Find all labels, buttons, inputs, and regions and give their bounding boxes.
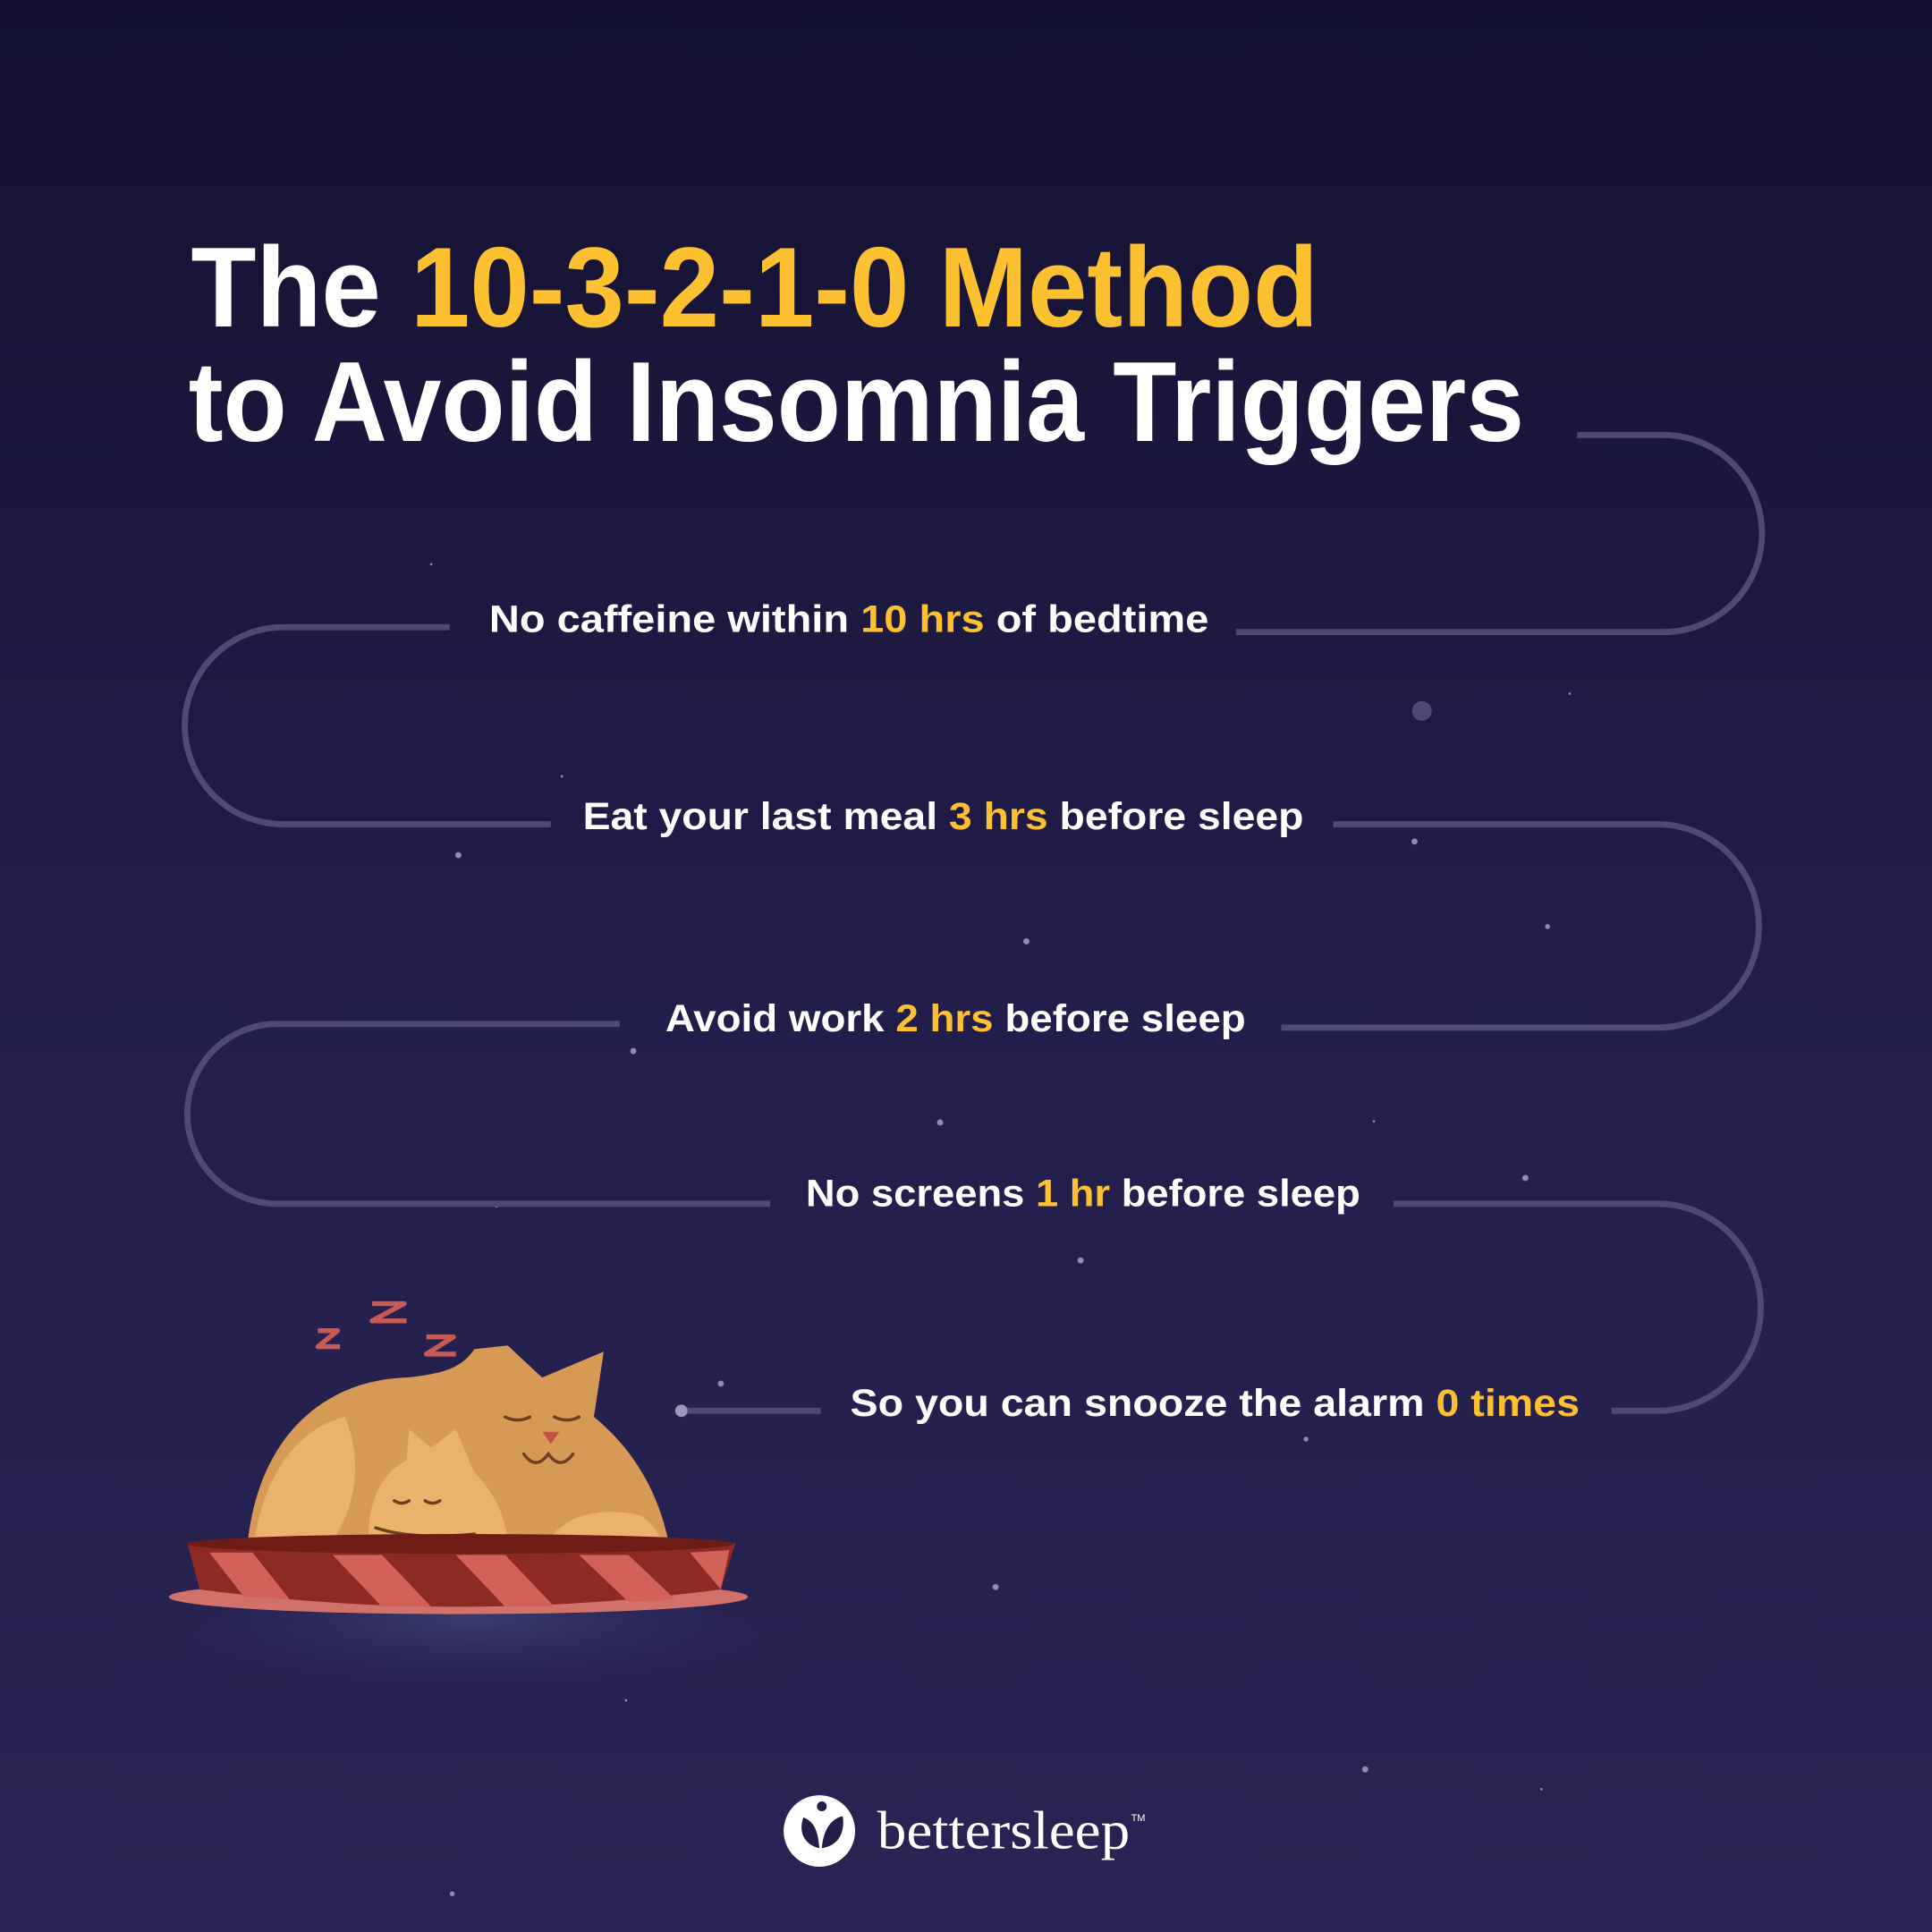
face details xyxy=(376,1417,579,1536)
zzz xyxy=(318,1303,456,1446)
step 10: No caffeine within 10 hrs of bedtime xyxy=(489,598,1208,641)
kitten xyxy=(369,1429,507,1559)
bed xyxy=(169,1580,748,1614)
logo: TM xyxy=(1131,1813,1145,1824)
path start dot xyxy=(675,1404,688,1417)
illustration: sleeping cats in bed xyxy=(169,1303,764,1707)
logo wordmark: bettersleep xyxy=(877,1801,1130,1860)
step 0: So you can snooze the alarm 0 times xyxy=(851,1382,1580,1425)
stars xyxy=(430,564,1571,1896)
logo xyxy=(784,1795,1145,1867)
logo icon xyxy=(784,1795,855,1867)
big cat body xyxy=(247,1345,672,1559)
step 3: Eat your last meal 3 hrs before sleep xyxy=(583,795,1303,838)
step texts xyxy=(489,598,1580,1425)
title: The 10-3-2-1-0 Method xyxy=(191,224,1318,351)
title: to Avoid Insomnia Triggers xyxy=(189,338,1524,465)
title xyxy=(189,224,1524,465)
winding path xyxy=(185,435,1762,1411)
step 2: Avoid work 2 hrs before sleep xyxy=(665,997,1246,1040)
step 1: No screens 1 hr before sleep xyxy=(806,1173,1360,1216)
